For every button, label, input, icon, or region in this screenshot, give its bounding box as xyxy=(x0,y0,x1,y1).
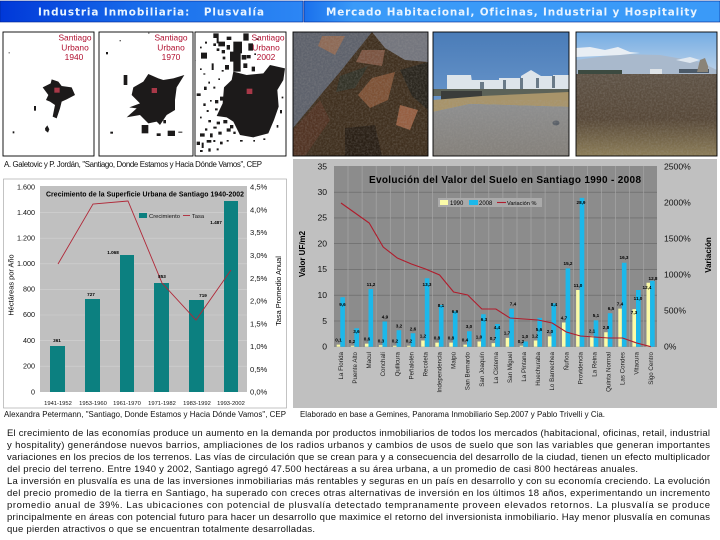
legend: Tasa xyxy=(192,214,205,220)
value labels: 1990: 1,7 xyxy=(504,330,511,336)
value labels: 2008: 2,6 xyxy=(410,326,417,332)
left axis: 1.200 xyxy=(17,234,35,242)
left axis xyxy=(6,182,35,396)
body text: promedio anual de 39%. Las ubicaciones con potencial de plusvalía detectado tempranamente proveen elevados retornos. La plusvalía se produce xyxy=(7,500,710,511)
value labels: 1990: 0,6 xyxy=(364,336,371,342)
commune labels: La Reina xyxy=(591,351,598,377)
left axis: Valor UF/m2 xyxy=(298,230,307,277)
left axis: 800 xyxy=(23,284,35,294)
value labels: 2008: 6,5 xyxy=(608,306,615,311)
caption: Gemines source: Elaborado en base a Gemines, Panorama Inmobiliario Sep.2007 y Pablo Trivelli y Cia. xyxy=(300,410,605,419)
value labels: 2008: 4,9 xyxy=(382,314,389,320)
commune labels: Huechuraba xyxy=(535,351,542,386)
value labels: 1990: 0,2 xyxy=(349,339,356,344)
value labels: 2008: 16,3 xyxy=(620,255,629,260)
value labels: 1990: 0,7 xyxy=(490,336,497,341)
right axis: Tasa Promedio Anual xyxy=(274,256,283,326)
right axis: 2500% xyxy=(664,162,691,172)
right axis: 0,0% xyxy=(250,388,268,396)
map panel: Santiago Urbano 1970: 1970 xyxy=(162,52,181,62)
right axis: 500% xyxy=(664,306,686,316)
value labels: 1990: 0,3 xyxy=(378,338,385,344)
category labels: 1953-1960 xyxy=(79,401,107,407)
photo: white buildings behind vacant lot xyxy=(433,32,569,156)
left axis: Héctáreas por Año xyxy=(6,254,16,316)
right axis: 1,0% xyxy=(250,342,268,351)
chart: Evolución del Valor del Suelo xyxy=(293,159,717,408)
category labels: 1941-1952 xyxy=(44,401,72,407)
commune labels: San Miguel xyxy=(507,352,514,383)
left axis: 400 xyxy=(23,336,35,345)
map panel: Santiago Urbano 2002: 2002 xyxy=(257,52,276,62)
value labels: 1990: 7,3 xyxy=(631,310,638,315)
body text: El crecimiento de las economías produce un aumento en la demanda por productos inmobiliarios de todos los mercados (habitacional, oficinas, retail, industrial xyxy=(7,428,710,439)
photo: plowed field and Andes xyxy=(576,32,717,156)
commune labels: Independencia xyxy=(437,351,444,393)
commune labels: Maipú xyxy=(451,351,458,369)
value labels: 1990: 0,2 xyxy=(392,338,399,344)
value labels: 1990: 0,4 xyxy=(462,338,469,342)
left axis: 0 xyxy=(31,388,35,396)
legend: 1990 xyxy=(450,201,464,207)
legend: 2008 xyxy=(479,201,493,207)
right axis: 1,5% xyxy=(250,320,268,328)
map panel: Santiago Urbano 1940: Santiago xyxy=(58,32,92,42)
right axis: 4,5% xyxy=(250,182,268,192)
value labels: 2008: 6,3 xyxy=(481,317,488,322)
value labels: 1990: 0,1 xyxy=(335,338,342,342)
left axis: 30 xyxy=(317,187,327,197)
chart title: Crecimiento de la Superficie Urbana de Santiago 1940-2002 xyxy=(46,192,244,198)
commune labels: Recoleta xyxy=(422,351,430,376)
legend: Crecimiento xyxy=(149,214,180,220)
map panel: Santiago Urbano 1940: Urbano xyxy=(61,42,89,52)
right axis: 0% xyxy=(664,342,677,352)
bar value labels xyxy=(53,220,222,343)
value labels: 2008: 3,0 xyxy=(466,324,473,329)
value labels: 1990: 0,8 xyxy=(434,336,441,340)
map panel: Santiago Urbano 1940 xyxy=(3,32,94,156)
right axis: 3,5% xyxy=(250,228,268,237)
value labels: 1990: 7,4 xyxy=(617,302,624,306)
left axis: 15 xyxy=(317,264,327,274)
header bar: Industria Inmobiliaria xyxy=(0,1,303,22)
header bar: Industria Inmobiliaria: Industria Inmobiliaria: Plusvalía xyxy=(38,6,264,18)
legend xyxy=(139,213,205,220)
map panel: Santiago Urbano 2002: Urbano xyxy=(252,42,280,52)
value labels: 2008: 7,4 xyxy=(510,302,517,306)
category labels: 1993-2002 xyxy=(217,401,245,407)
bar value labels: 853 xyxy=(158,274,166,279)
value labels: 2008: 13,3 xyxy=(423,282,432,287)
value labels: 2008: 1,0 xyxy=(522,334,529,339)
value labels: 1990: 1,2 xyxy=(532,334,539,338)
commune labels: San Bernardo xyxy=(465,351,472,390)
bar value labels: 719 xyxy=(199,293,207,298)
commune labels: Macul xyxy=(366,352,373,369)
right axis: 1500% xyxy=(664,234,691,244)
map panel: Santiago Urbano 1970: Santiago xyxy=(154,32,188,42)
value labels: 2008: 28,9 xyxy=(577,200,586,205)
commune labels: San Joaquín xyxy=(479,351,486,387)
right axis: Variación xyxy=(704,237,713,273)
bars: 2008 xyxy=(340,198,655,347)
bars: 1990 xyxy=(337,283,650,347)
value labels: 2008: 11,2 xyxy=(367,282,376,287)
commune labels: Sigo Centro xyxy=(648,351,655,385)
body text: del precio del terreno. Entre 1940 y 2002, Santiago agregó 47.500 hectáreas a su área urbana, a un promedio de casi 800 hectáreas anuales. xyxy=(7,464,638,475)
body text xyxy=(7,428,710,535)
value labels: 1990: 11,0 xyxy=(574,283,583,288)
map panel: Santiago Urbano 1940: 1940 xyxy=(65,52,84,62)
map panel: Santiago Urbano 2002: Santiago xyxy=(251,32,285,42)
chart: Crecimiento de la Superficie Urbana xyxy=(4,179,286,408)
value labels: 2008: 5,1 xyxy=(593,313,600,318)
value labels: 2008: 5,6 xyxy=(536,327,543,332)
value labels: 2008: 8,4 xyxy=(551,302,558,307)
right axis: 2,0% xyxy=(250,296,268,306)
header bar: Mercado Habitacional xyxy=(304,1,720,22)
body text: y hospitality) generándose nuevos barrios, ampliaciones de los radios urbanos y cambios de usos de suelo que son las variables que generan importantes xyxy=(7,440,710,451)
photo: aerial view xyxy=(293,32,428,156)
left axis: 25 xyxy=(317,212,327,222)
commune labels: Puente Alto xyxy=(352,351,359,384)
value labels: 2008: 11,0 xyxy=(634,296,643,301)
left axis: 1.400 xyxy=(17,208,35,217)
value labels: 2008 xyxy=(339,200,658,339)
left axis: 35 xyxy=(317,162,327,172)
value labels: 1990: 0,2 xyxy=(406,338,413,344)
bar value labels: 361 xyxy=(53,338,61,343)
left axis xyxy=(298,162,327,352)
value labels: 1990: 2,8 xyxy=(603,325,610,330)
right axis: 1000% xyxy=(664,270,691,280)
right axis: 3,0% xyxy=(250,251,268,260)
value labels: 1990: 0,2 xyxy=(518,339,525,344)
left axis: 5 xyxy=(322,316,327,326)
caption: Petermann source: Alexandra Petermann, "Santiago, Donde Estamos y Hacia Dónde Vamos", CEP xyxy=(4,410,286,419)
value labels: 1990: 2,1 xyxy=(589,328,596,334)
commune labels: Conchalí xyxy=(380,352,387,376)
legend: Variación % xyxy=(507,201,536,207)
chart title: Evolución del Valor del Suelo en Santiago 1990 - 2008 xyxy=(369,175,641,186)
map panel: Santiago Urbano 1970 xyxy=(99,32,193,156)
right axis: 0,5% xyxy=(250,365,268,374)
left axis: 20 xyxy=(317,238,327,248)
value labels: 2008: 8,1 xyxy=(438,303,445,308)
bar value labels: 1.068 xyxy=(107,250,119,255)
left axis: 200 xyxy=(23,362,35,370)
category labels xyxy=(44,401,245,407)
commune labels xyxy=(338,351,655,393)
value labels: 2008: 4,4 xyxy=(494,325,501,330)
commune labels: Ñuñoa xyxy=(563,351,570,370)
left axis: 600 xyxy=(23,310,35,319)
bars: crecimiento xyxy=(50,201,238,392)
commune labels: Las Condes xyxy=(620,352,627,385)
body text: variaciones en los precios de los terrenos. Las vías de circulación que se crean para y a consecuencia del desarrollo de la ciudad, tienen un efecto multiplicador xyxy=(7,452,710,463)
bar value labels: 1.487 xyxy=(210,220,222,225)
commune labels: Providencia xyxy=(577,351,584,384)
left axis: 0 xyxy=(322,342,327,352)
value labels: 1990: 1,2 xyxy=(420,334,427,338)
left axis: 1.600 xyxy=(17,182,35,192)
map panel: Santiago Urbano 1970: Urbano xyxy=(157,42,185,52)
value labels: 1990: 12,4 xyxy=(643,285,652,290)
value labels: 1990: 0,8 xyxy=(448,336,455,340)
value labels: 2008: 9,6 xyxy=(339,302,346,307)
right axis: 2,5% xyxy=(250,274,268,283)
left axis: 1.000 xyxy=(17,259,35,268)
value labels: 2008: 15,2 xyxy=(564,261,573,266)
right axis xyxy=(664,162,713,352)
caption: Galetovic source: A. Galetovic y P. Jordán, "Santiago, Donde Estamos y Hacia Dónde Vamos", CEP xyxy=(4,160,262,169)
body text: que pierden atractivos o que se encuentran totalmente desarrolladas. xyxy=(7,524,315,535)
left axis: 10 xyxy=(317,290,327,300)
body text: del precio promedio de la tierra en Santiago, ha superado con creces otras alternativas de inversión en los últimos 18 años, experimentando un incremento xyxy=(7,488,710,499)
commune labels: Lo Barnechea xyxy=(549,351,556,391)
category labels: 1983-1992 xyxy=(183,401,211,407)
commune labels: Vitacura xyxy=(634,351,641,375)
line: variación xyxy=(341,203,651,347)
legend xyxy=(438,198,542,207)
commune labels: Peñalolén xyxy=(408,351,415,380)
value labels: 1990: 1,0 xyxy=(476,334,483,340)
category labels: 1971-1982 xyxy=(148,401,176,407)
line: tasa xyxy=(58,201,231,320)
commune labels: Quilicura xyxy=(394,351,401,376)
value labels: 2008: 3,2 xyxy=(396,324,403,328)
commune labels: La Pintana xyxy=(521,351,528,382)
value labels: 2008: 6,9 xyxy=(452,309,459,314)
commune labels: La Cisterna xyxy=(493,351,500,384)
value labels: 2008: 3,6 xyxy=(353,329,360,334)
category labels: 1961-1970 xyxy=(113,401,141,407)
body text: La inversión en plusvalía es una de las inversiones inmobiliarias más rentables y seguras en un país en desarrollo y con su economía creciendo. La evolución xyxy=(7,476,710,487)
value labels: 1990: 2,0 xyxy=(547,329,554,334)
value labels: 1990: 4,7 xyxy=(561,316,568,320)
commune labels: La Florida xyxy=(338,351,345,380)
map panel: Santiago Urbano 2002 xyxy=(195,32,286,156)
body text: principalmente en áreas con potencial futuro para hacer un desarrollo que maximice el retorno del inversionista inmobiliario. Hay menor plusvalía en comunas xyxy=(7,512,710,523)
right axis: 4,0% xyxy=(250,206,268,214)
bar value labels: 727 xyxy=(87,292,95,297)
value labels: 2008: 12,8 xyxy=(649,276,658,281)
commune labels: Quinta Normal xyxy=(606,352,612,392)
header bar: Mercado Habitacional: Mercado Habitacional, Oficinas, Industrial y Hospitality xyxy=(326,6,697,18)
value labels: 1990 xyxy=(335,283,652,344)
right axis: 2000% xyxy=(664,198,691,208)
right axis xyxy=(250,182,283,396)
